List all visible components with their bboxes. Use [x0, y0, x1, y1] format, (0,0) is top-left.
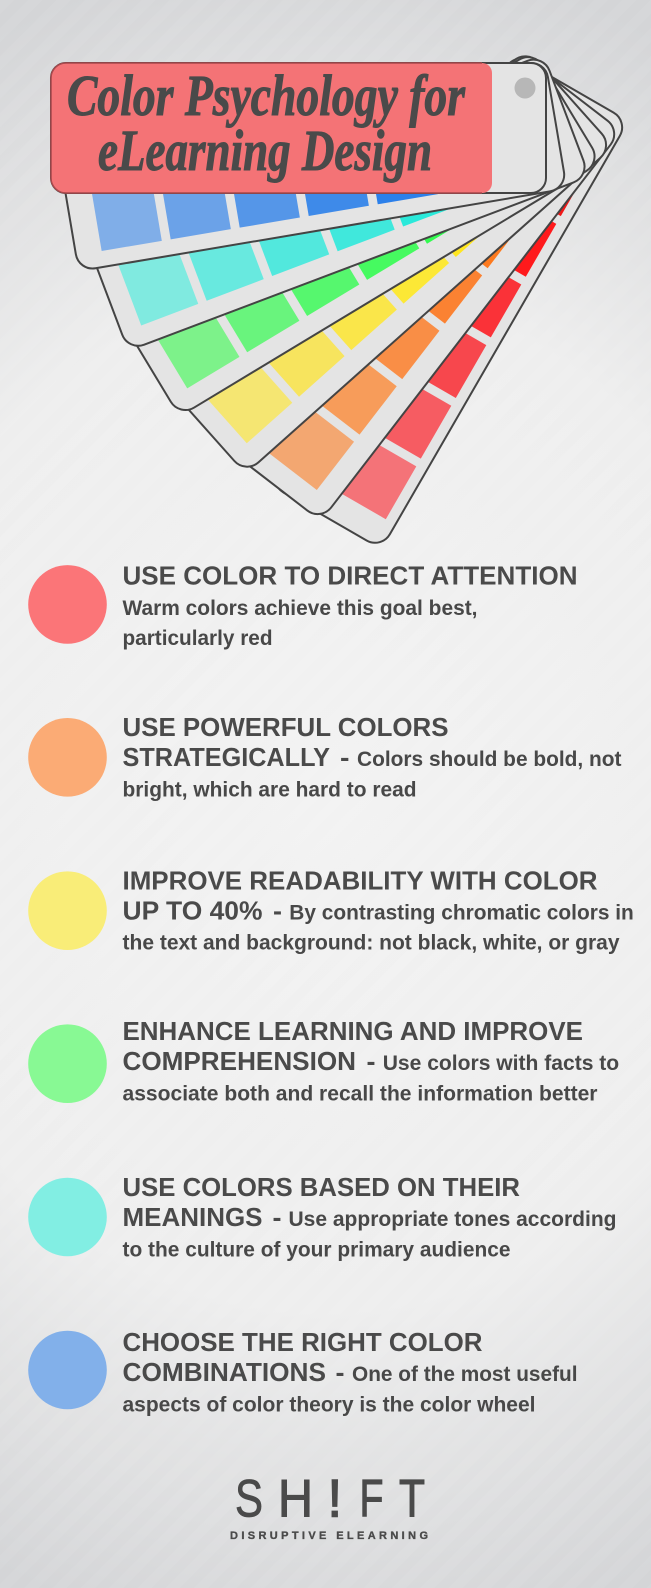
- item 3: readability: [28, 865, 634, 954]
- tagline: DISRUPTIVE ELEARNING: [230, 1530, 428, 1542]
- heading: USE COLOR TO DIRECT ATTENTION: [122, 560, 578, 590]
- item 2: powerful colors: [28, 712, 621, 802]
- card: cyan: [82, 55, 589, 351]
- heading: ENHANCE LEARNING AND IMPROVE: [122, 1016, 583, 1046]
- heading: -: [272, 1202, 282, 1232]
- item 6: combinations: [28, 1327, 577, 1417]
- description: [122, 1207, 616, 1262]
- description: By contrasting chromatic colors in: [289, 900, 634, 924]
- item 4: comprehension: [28, 1016, 619, 1106]
- card: blue: [57, 60, 567, 271]
- card: red: [269, 56, 628, 549]
- wordmark: H: [278, 1470, 313, 1528]
- description: to the culture of your primary audience: [122, 1238, 511, 1262]
- description: Colors should be bold, not: [357, 747, 622, 771]
- description: associate both and recall the information better: [122, 1082, 598, 1106]
- circle: cyan: [28, 1178, 107, 1256]
- heading: STRATEGICALLY: [122, 742, 330, 772]
- heading: USE POWERFUL COLORS: [122, 712, 448, 742]
- description: bright, which are hard to read: [122, 778, 416, 802]
- description: One of the most useful: [352, 1362, 578, 1386]
- wordmark: S: [235, 1470, 263, 1528]
- description: particularly red: [122, 626, 272, 650]
- hole in the card: [514, 78, 536, 98]
- description: [122, 747, 622, 802]
- heading: -: [273, 895, 282, 925]
- item 5: meanings: [28, 1172, 616, 1262]
- description: [122, 1051, 619, 1106]
- card: yellow: [159, 49, 613, 474]
- color swatch fan: [51, 49, 628, 549]
- item 1: direct attention: [28, 560, 577, 650]
- description: Warm colors achieve this goal best,: [122, 596, 478, 620]
- card: green: [112, 51, 601, 416]
- heading: [122, 1327, 483, 1387]
- heading: -: [340, 742, 350, 772]
- heading: -: [366, 1046, 376, 1076]
- circle: yellow: [28, 871, 107, 950]
- description: [122, 1362, 578, 1417]
- wordmark: [235, 1470, 425, 1528]
- heading: IMPROVE READABILITY WITH COLOR: [122, 865, 598, 895]
- description: Use appropriate tones according: [288, 1207, 616, 1231]
- heading: UP TO 40%: [122, 895, 262, 925]
- description: Use colors with facts to: [383, 1051, 619, 1075]
- description: [122, 596, 478, 650]
- heading: [122, 865, 598, 925]
- title text: Color Psychology for: [67, 63, 465, 128]
- description: aspects of color theory is the color wheel: [122, 1393, 536, 1417]
- circle: blue: [28, 1331, 107, 1409]
- card: front: [51, 63, 546, 193]
- title banner: [51, 63, 492, 193]
- description: the text and background: not black, white, or gray: [122, 930, 620, 954]
- heading: [122, 1172, 520, 1232]
- heading: USE COLORS BASED ON THEIR: [122, 1172, 520, 1202]
- heading: MEANINGS: [122, 1202, 262, 1232]
- wordmark: !: [328, 1470, 342, 1528]
- circle: red: [28, 565, 107, 644]
- heading: -: [336, 1357, 344, 1387]
- heading: [122, 712, 448, 772]
- heading: COMPREHENSION: [122, 1046, 356, 1076]
- heading: COMBINATIONS: [122, 1357, 326, 1387]
- description: [122, 900, 634, 954]
- wordmark: F: [360, 1470, 384, 1528]
- title text: eLearning Design: [98, 118, 432, 183]
- heading: CHOOSE THE RIGHT COLOR: [122, 1327, 483, 1357]
- circle: orange: [28, 718, 107, 797]
- circle: green: [28, 1024, 107, 1103]
- logo: SHIFT: [230, 1470, 428, 1542]
- card: orange: [218, 52, 621, 521]
- wordmark: T: [399, 1470, 425, 1528]
- heading: [122, 1016, 583, 1076]
